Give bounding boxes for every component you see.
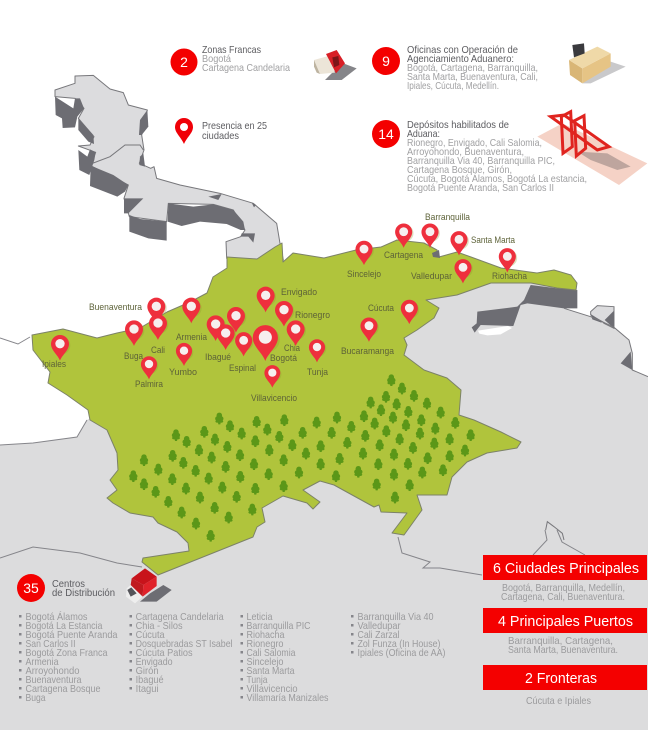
panel: 4 Principales Puertos: Barranquilla, Cartagena,: [508, 635, 613, 647]
text: Presencia en 25 ciudades: Presencia en 25: [202, 120, 267, 132]
text: Depósitos habilitados: Rionegro, Envigado, Cali Salomia,: [407, 137, 542, 149]
text: Oficinas con Operación: [407, 44, 538, 92]
pin: Yumbo: [176, 343, 193, 366]
icon: port crane: [537, 112, 647, 185]
list: distribution centres column 3: Sincelejo: [246, 656, 284, 668]
list: distribution centres column 2: Cúcuta Patios: [136, 647, 193, 659]
list: distribution centres column 1: Buga: [26, 692, 46, 704]
text: Zonas Francas: Cartagena Candelaria: [202, 62, 290, 74]
list: distribution centres column 2: Ibagué: [136, 674, 164, 686]
badge: Zonas Francas 2: [170, 48, 198, 76]
text: Zonas Francas: Bogotá: [202, 53, 231, 65]
pin: Cali: [149, 314, 168, 340]
pin: Espinal: [235, 332, 253, 356]
icon: presence pin: [175, 118, 193, 144]
list: distribution centres column 2: Dosquebradas ST Isabel: [136, 638, 233, 650]
list: distribution centres column 3: Villavicencio: [246, 683, 298, 695]
city name labels: Valledupar: [411, 271, 452, 282]
panel: 4 Principales Puertos: [483, 608, 647, 656]
list: distribution centres column 4: Barranquilla Via 40: [358, 611, 434, 623]
city name labels: Sincelejo: [347, 269, 381, 280]
pin: Ibagué second: [217, 324, 236, 350]
text: Centros de Distribución: [52, 578, 115, 599]
city name labels: Palmira: [135, 379, 164, 390]
list: distribution centres column 3: Tunja: [246, 674, 268, 686]
list: distribution centres column 2: Envigado: [136, 656, 173, 668]
badge: Centros 35: [17, 574, 45, 602]
text: Depósitos habilitados: [407, 119, 587, 194]
panel: 6 Ciudades Principales: Cartagena, Cali, Buenaventura.: [501, 591, 625, 603]
text: Presencia en 25 ciudades: [202, 120, 267, 142]
pin: Barranquilla: [421, 223, 440, 248]
city name labels: Chia: [284, 343, 301, 354]
list: distribution centres column 2: Cartagena Candelaria: [136, 611, 224, 623]
text: Depósitos habilitados: Arroyohondo, Buenaventura,: [407, 146, 524, 158]
text: Depósitos habilitados: Cúcuta, Bogotá Álamos, Bogotá La estancia,: [407, 172, 587, 185]
city name labels: Villavicencio: [251, 393, 297, 404]
list: distribution centres column 2: Cúcuta: [136, 629, 165, 641]
list: distribution centres column 4: Cali Zarzal: [358, 629, 400, 641]
pin: Ipiales: [51, 335, 70, 361]
list: distribution centres column 3: Rionegro: [246, 638, 284, 650]
pin: Chia: [287, 320, 306, 346]
city name labels: Riohacha: [492, 271, 528, 282]
text: Oficinas con Operación: Agenciamiento Aduanero:: [407, 53, 514, 65]
city name labels: Envigado: [281, 287, 317, 298]
panel: 6 Ciudades Principales: 6 Ciudades Principales: [493, 560, 639, 577]
pin: Palmira: [141, 356, 158, 379]
list: distribution centres column 1: Arroyohondo: [26, 665, 80, 677]
city name labels: Bucaramanga: [341, 346, 395, 357]
list: distribution centres column 1: Cartagena Bosque: [26, 683, 101, 695]
map: border lines: [0, 337, 585, 575]
city name labels: Yumbo: [169, 367, 197, 378]
text: Centros de Distribución: de Distribución: [52, 587, 115, 599]
map pins: western and central cities: [51, 287, 326, 388]
panel: 2 Fronteras: Cúcuta e Ipiales: [526, 695, 591, 707]
badge: Oficinas 9: 9: [382, 53, 390, 69]
map: Central America: [55, 75, 284, 266]
icon: customs desk: [569, 43, 626, 83]
city name labels: Bogotá: [270, 353, 298, 364]
map: Colombia: [32, 240, 577, 575]
pin: Valledupar: [454, 259, 473, 283]
city name labels: Cartagena: [384, 250, 424, 261]
city name labels: Espinal: [229, 363, 256, 374]
city name labels: [42, 212, 528, 404]
icon: forklift: [314, 50, 357, 80]
list: distribution centres column 1: San Carlos II: [26, 638, 76, 650]
icon: delivery truck: [126, 568, 172, 603]
text: Centros de Distribución: Centros: [52, 578, 85, 590]
text: Depósitos habilitados: Barranquilla Via 40, Barranquilla PIC,: [407, 155, 555, 167]
pin: Santa Marta: [450, 231, 469, 255]
trees: forest: [129, 374, 475, 542]
pin: Riohacha: [499, 248, 517, 272]
pin: Armenia: [182, 298, 202, 323]
text: Oficinas con Operación: Santa Marta, Buenaventura, Cali,: [407, 71, 538, 83]
badge: Depósitos 14: 14: [378, 126, 394, 142]
text: Depósitos habilitados: Depósitos habilitados de: [407, 119, 509, 131]
text: Zonas Francas: [202, 44, 290, 74]
list: distribution centres column 1: Buenaventura: [26, 674, 82, 686]
badge: Oficinas 9: [372, 47, 400, 75]
city name labels: Cali: [151, 345, 165, 356]
list: distribution centres column 1: Bogotá Puente Aranda: [26, 629, 118, 641]
text: Depósitos habilitados: Bogotá Puente Aranda, San Carlos II: [407, 182, 554, 194]
list: distribution centres column 1: Bogotá La Estancia: [26, 620, 103, 632]
list: distribution centres column 2: Chia - Silos: [136, 620, 183, 632]
list: distribution centres column 3: Santa Marta: [246, 665, 295, 677]
text: Oficinas con Operación: Bogotá, Cartagena, Barranquilla,: [407, 62, 538, 74]
list: distribution centres column 2: Girón: [136, 665, 159, 677]
badge: Zonas Francas 2: 2: [180, 54, 188, 70]
pin: Bucaramanga: [360, 317, 379, 342]
list: distribution centres column 4: Valledupar: [358, 620, 401, 632]
city name labels: Cúcuta: [368, 303, 395, 314]
pin: Cartagena: [395, 223, 413, 248]
list: distribution centres column 1: Bogotá Álamos: [26, 610, 88, 623]
text: Zonas Francas: Zonas Francas: [202, 44, 261, 56]
city name labels: Rionegro: [295, 310, 330, 321]
pin: Rionegro: [275, 301, 294, 327]
panel: 2 Fronteras: 2 Fronteras: [525, 670, 597, 687]
city name labels: Tunja: [307, 367, 329, 378]
pin: Villavicencio: [264, 365, 281, 388]
badge: Depósitos 14: [372, 120, 400, 148]
panel: 2 Fronteras: [483, 665, 647, 707]
pin: Envigado: [257, 287, 276, 312]
panel: 4 Principales Puertos: 4 Principales Puertos: [498, 613, 633, 630]
map pins: northern cities: [355, 223, 517, 342]
background: neighbouring land: [0, 283, 648, 730]
list: distribution centres column 3: Villamaría Manizales: [246, 692, 328, 704]
text: Oficinas con Operación: Ipiales, Cúcuta, Medellín.: [407, 80, 499, 92]
city name labels: Buga: [124, 351, 144, 362]
pin: Cúcuta: [401, 300, 419, 324]
list: distribution centres column 3: [240, 611, 328, 704]
list: distribution centres column 2: [130, 611, 233, 695]
panel: 4 Principales Puertos: Santa Marta, Buenaventura.: [508, 644, 618, 656]
text: Oficinas con Operación: Oficinas con Operación de: [407, 44, 518, 56]
city name labels: Santa Marta: [471, 235, 516, 246]
list: distribution centres column 3: Riohacha: [246, 629, 285, 641]
city name labels: Ipiales: [42, 359, 66, 370]
list: distribution centres column 4: Ipiales (Oficina de AA): [358, 647, 446, 659]
badge: Centros 35: 35: [23, 580, 39, 596]
text: Depósitos habilitados: Cartagena Bosque, Girón,: [407, 164, 512, 176]
pin: Manizales: [227, 307, 246, 333]
list: distribution centres column 3: Cali Salomia: [246, 647, 296, 659]
map: Venezuela coast details: [472, 285, 648, 540]
pin: Bogotá: [253, 325, 280, 361]
pin: Buga: [125, 320, 144, 346]
list: distribution centres column 2: Itagui: [136, 683, 159, 695]
list: distribution centres column 4: Zol Funza (In House): [358, 638, 440, 650]
pin: Buenaventura: [147, 298, 167, 323]
text: Depósitos habilitados: Aduana:: [407, 128, 440, 140]
city name labels: Buenaventura: [89, 302, 143, 313]
list: distribution centres column 4: [351, 611, 446, 659]
map: bay: [432, 250, 440, 258]
list: distribution centres column 1: Bogotá Zona Franca: [26, 647, 108, 659]
panel: 6 Ciudades Principales: Bogotá, Barranquilla, Medellín,: [502, 582, 625, 594]
panel: 6 Ciudades Principales: [483, 555, 647, 603]
list: distribution centres column 1: [19, 610, 118, 704]
pin: Tunja: [309, 339, 326, 362]
text: Presencia en 25 ciudades: ciudades: [202, 130, 239, 142]
city name labels: Barranquilla: [425, 212, 471, 223]
city name labels: Ibagué: [205, 352, 231, 363]
pin: Ibagué: [207, 315, 226, 341]
list: distribution centres column 1: Armenia: [26, 656, 59, 668]
city name labels: Armenia: [176, 332, 208, 343]
list: distribution centres column 3: Leticia: [246, 611, 273, 623]
list: distribution centres column 3: Barranquilla PIC: [246, 620, 311, 632]
pin: Sincelejo: [355, 241, 374, 265]
